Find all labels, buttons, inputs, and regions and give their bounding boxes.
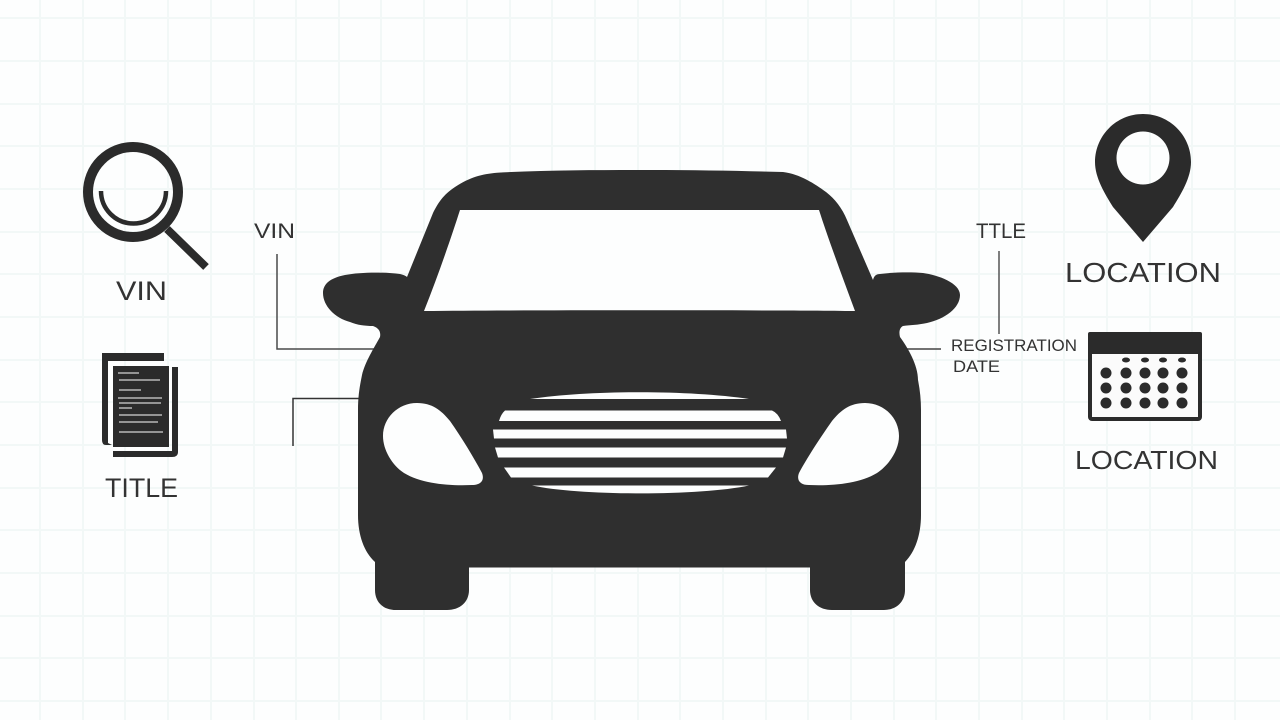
- callout line: VIN: [277, 254, 378, 349]
- label: location, lower: LOCATION: [1075, 445, 1218, 475]
- car body: [323, 170, 960, 610]
- callout label: title: TTLE: [976, 220, 1026, 243]
- icon: magnifying glass: [88, 147, 206, 267]
- callout line: title: [998, 251, 1000, 334]
- label: VIN: VIN: [116, 276, 167, 306]
- left headlight: [383, 403, 483, 485]
- callout line: registration date: [904, 348, 941, 350]
- label: location, upper: LOCATION: [1065, 257, 1221, 288]
- icon: calendar: [1088, 332, 1202, 419]
- label: title, left: TITLE: [105, 473, 178, 503]
- callout label: registration date: DATE: [953, 357, 1000, 376]
- car front silhouette: [323, 170, 960, 610]
- callout label: VIN: VIN: [254, 220, 295, 243]
- callout line: lower left: [293, 398, 360, 446]
- windshield: [424, 210, 855, 311]
- right headlight: [798, 403, 899, 485]
- callout label: registration date: REGISTRATION: [951, 336, 1077, 355]
- grille slats: [493, 392, 787, 493]
- icon: location pin: [1095, 114, 1191, 242]
- icon: document: [102, 353, 178, 457]
